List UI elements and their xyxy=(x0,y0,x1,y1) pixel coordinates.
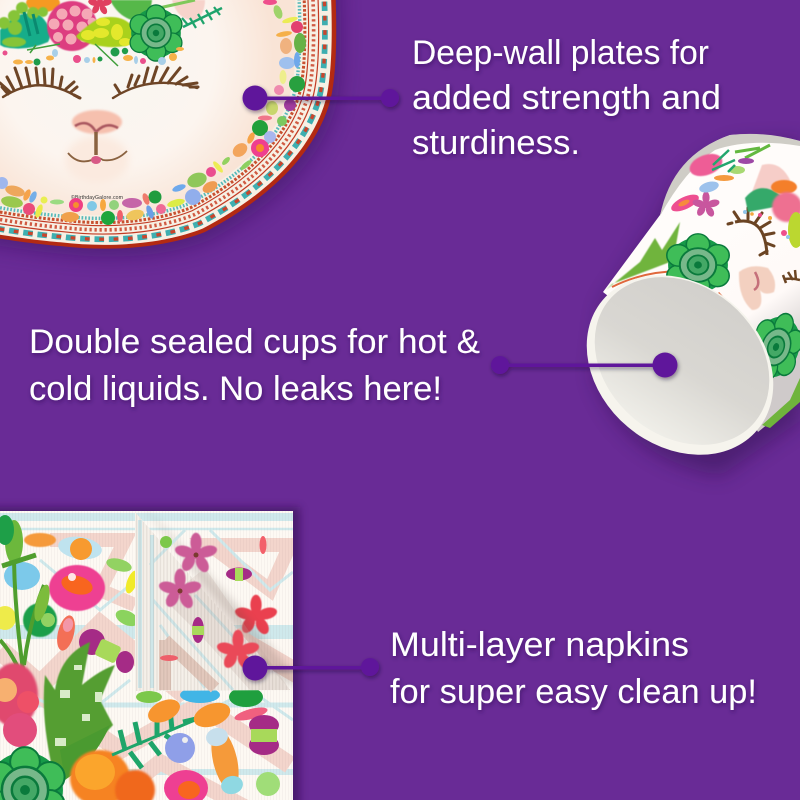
caption: napkins xyxy=(390,626,757,711)
caption: napkins: Multi-layer napkins xyxy=(390,626,689,664)
eyelashes xyxy=(0,67,198,98)
napkin folded corner xyxy=(135,503,302,691)
napkin chevron pattern xyxy=(0,517,300,800)
flower crown xyxy=(0,0,222,66)
caption: plates: sturdiness. xyxy=(412,124,580,162)
cup base xyxy=(551,238,800,492)
panel: napkin xyxy=(0,503,302,800)
caption: napkins: for super easy clean up! xyxy=(390,673,757,711)
cup body xyxy=(603,134,800,432)
napkin sheet xyxy=(0,511,293,800)
leader: napkin xyxy=(242,656,379,680)
caption: cups: Double sealed cups for hot & xyxy=(29,323,480,361)
plate rim xyxy=(0,0,336,249)
panel: plate xyxy=(0,0,341,257)
caption: plates xyxy=(412,34,721,162)
muzzle and nose xyxy=(65,110,129,184)
cup top rim xyxy=(660,134,800,216)
caption: plates: Deep-wall plates for xyxy=(412,34,709,72)
napkin artwork xyxy=(0,515,280,800)
caption: plates: added strength and xyxy=(412,79,721,117)
caption: cups xyxy=(29,323,480,408)
candy beads xyxy=(0,0,306,225)
copyright text: ©BirthdayGalore.com xyxy=(71,194,123,201)
cup decorations xyxy=(606,145,800,428)
leader: plate xyxy=(242,86,399,110)
plate bowl xyxy=(0,0,296,215)
leader: cup xyxy=(491,352,678,378)
panel: cup xyxy=(551,134,800,492)
caption: cups: cold liquids. No leaks here! xyxy=(29,370,442,408)
